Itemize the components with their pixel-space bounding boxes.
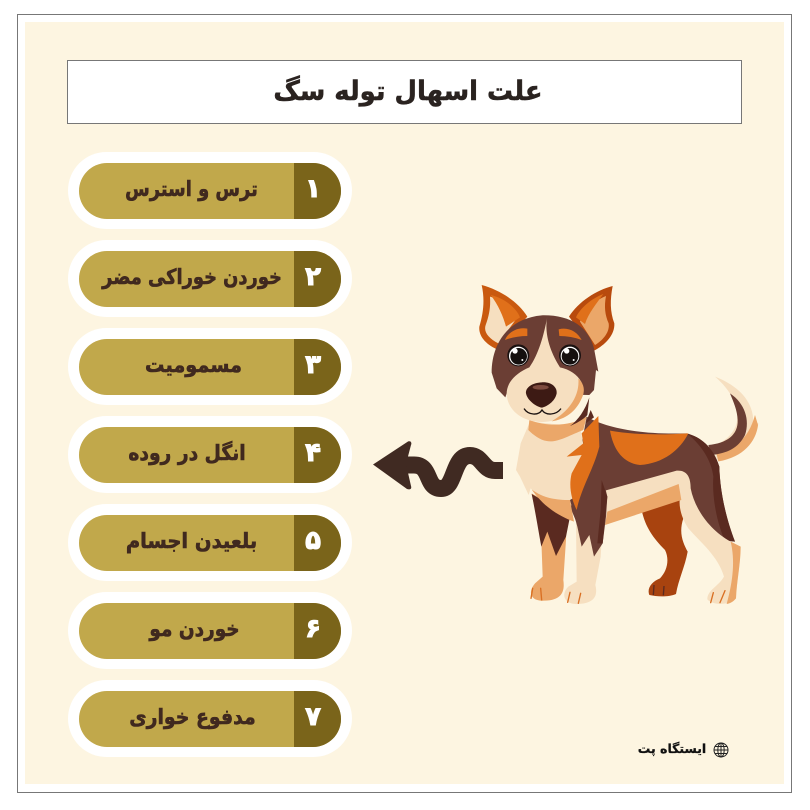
icon: globe bbox=[714, 742, 728, 758]
right eye bbox=[559, 344, 581, 366]
list item 6 bbox=[68, 592, 352, 669]
list item 4 bbox=[68, 416, 352, 493]
list item 6: ۶ bbox=[305, 614, 321, 644]
body bbox=[570, 417, 735, 557]
list item 1 bbox=[68, 152, 352, 229]
muzzle and blaze bbox=[507, 317, 583, 422]
mouth bbox=[524, 409, 561, 414]
cheek shadow bbox=[552, 378, 584, 421]
list item 3 bbox=[68, 328, 352, 405]
left ear bbox=[479, 285, 527, 350]
title bbox=[67, 60, 742, 124]
list item 7: مدفوع خواری bbox=[129, 705, 256, 729]
list item 4: انگل در روده bbox=[128, 441, 246, 465]
left eye bbox=[507, 344, 529, 366]
list item 5 bbox=[68, 504, 352, 581]
nose bbox=[526, 382, 557, 408]
list item 7: ۷ bbox=[305, 702, 321, 732]
orange shoulder bbox=[567, 416, 599, 510]
list item 6: خوردن مو bbox=[149, 617, 240, 641]
illustration: puppy bbox=[479, 285, 758, 604]
far hind leg bbox=[642, 498, 688, 596]
right ear bbox=[569, 286, 614, 351]
tail bbox=[708, 377, 758, 462]
paw toes bbox=[531, 588, 725, 603]
orange saddle bbox=[610, 431, 688, 465]
brand label with globe icon bbox=[638, 741, 728, 758]
list item 4: ۴ bbox=[305, 438, 321, 468]
far paw toes bbox=[653, 585, 664, 595]
list item 5: بلعیدن اجسام bbox=[126, 529, 257, 553]
brand label with globe icon: ایستگاه پت bbox=[638, 741, 706, 756]
list item 5: ۵ bbox=[305, 526, 321, 556]
body dark flank bbox=[687, 433, 735, 542]
head bbox=[492, 315, 598, 397]
eyebrows bbox=[505, 328, 582, 340]
list item 3: ۳ bbox=[305, 350, 321, 380]
neck stripes bbox=[570, 397, 594, 426]
list item 1: ترس و استرس bbox=[125, 177, 258, 201]
chest fur bbox=[516, 417, 587, 522]
title: علت اسهال توله سگ bbox=[273, 76, 543, 107]
list item 2: خوردن خوراکی مضر bbox=[102, 265, 282, 289]
list item 7 bbox=[68, 680, 352, 757]
far front leg bbox=[531, 493, 570, 601]
near front leg bbox=[564, 480, 607, 604]
list item 1: ۱ bbox=[305, 174, 321, 204]
list item 3: مسمومیت bbox=[145, 353, 242, 377]
belly and near hind leg bbox=[605, 471, 741, 604]
list item 2 bbox=[68, 240, 352, 317]
arrow pointing to the list bbox=[373, 441, 503, 489]
list item 2: ۲ bbox=[305, 262, 321, 292]
